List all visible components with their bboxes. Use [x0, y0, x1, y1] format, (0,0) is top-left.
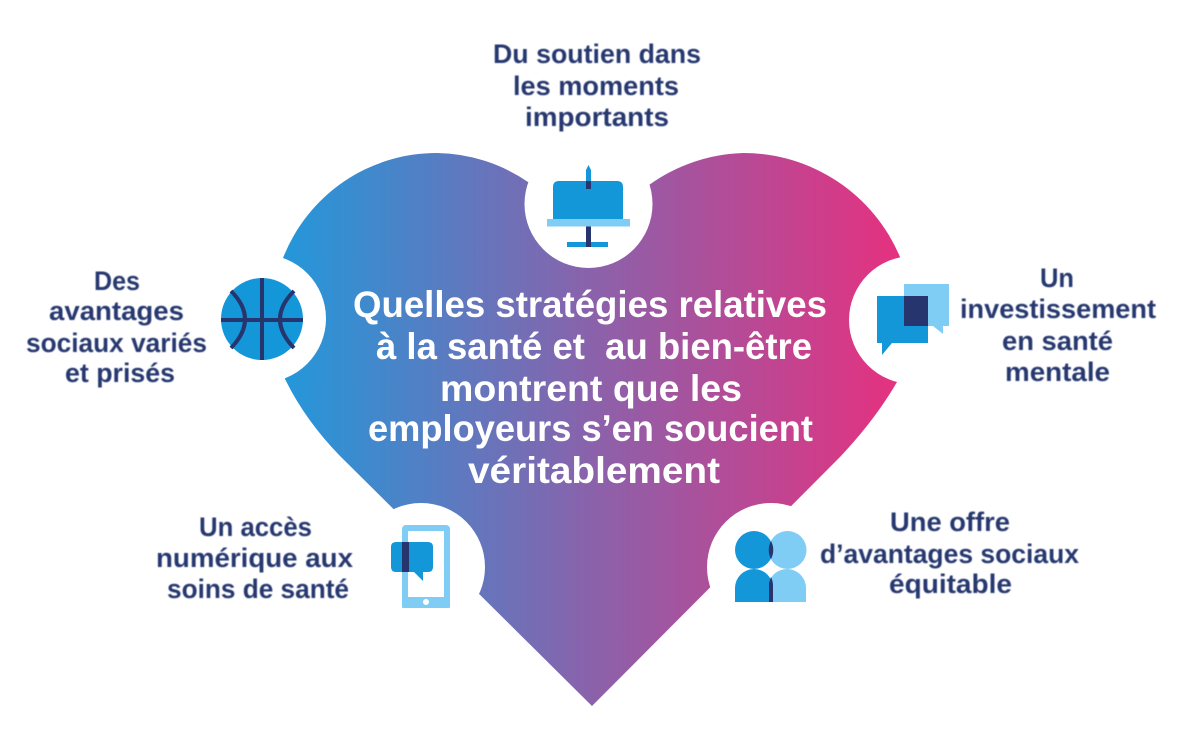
label: offre équitable: Une offre — [890, 507, 1010, 537]
label: avantages variés — [26, 266, 207, 388]
label: santé mentale: investissement — [960, 294, 1156, 324]
label: du soutien: importants — [525, 102, 669, 132]
icon: phone — [391, 528, 450, 608]
label: avantages variés: et prisés — [65, 358, 175, 388]
label: avantages variés: sociaux variés — [26, 328, 207, 358]
label: accès numérique: Un accès — [199, 512, 312, 542]
label: avantages variés: Des — [94, 266, 140, 296]
label: santé mentale — [960, 263, 1156, 387]
title: véritablement — [468, 450, 720, 491]
label: accès numérique — [156, 512, 353, 604]
title: Quelles stratégies relatives — [353, 284, 827, 325]
label: offre équitable — [820, 507, 1079, 599]
title — [353, 284, 827, 491]
title: à la santé et au bien-être — [376, 326, 812, 367]
icon: speech bubbles — [877, 284, 949, 355]
label: accès numérique: numérique aux — [156, 543, 353, 573]
label: du soutien — [493, 39, 701, 132]
title: employeurs s’en soucient — [368, 408, 813, 449]
label: santé mentale: en santé — [1002, 326, 1113, 356]
label: accès numérique: soins de santé — [167, 574, 349, 604]
label: du soutien: Du soutien dans — [493, 39, 701, 69]
label: offre équitable: d’avantages sociaux — [820, 539, 1079, 569]
heart shape — [198, 140, 977, 706]
label: du soutien: les moments — [513, 71, 679, 101]
label: santé mentale: Un — [1040, 263, 1074, 293]
label: santé mentale: mentale — [1005, 357, 1110, 387]
label: avantages variés: avantages — [49, 296, 184, 326]
icon: basketball — [221, 278, 303, 360]
label: offre équitable: équitable — [889, 569, 1012, 599]
icon: cake — [547, 165, 630, 247]
title: montrent que les — [440, 368, 742, 409]
icon: two people — [735, 531, 806, 602]
